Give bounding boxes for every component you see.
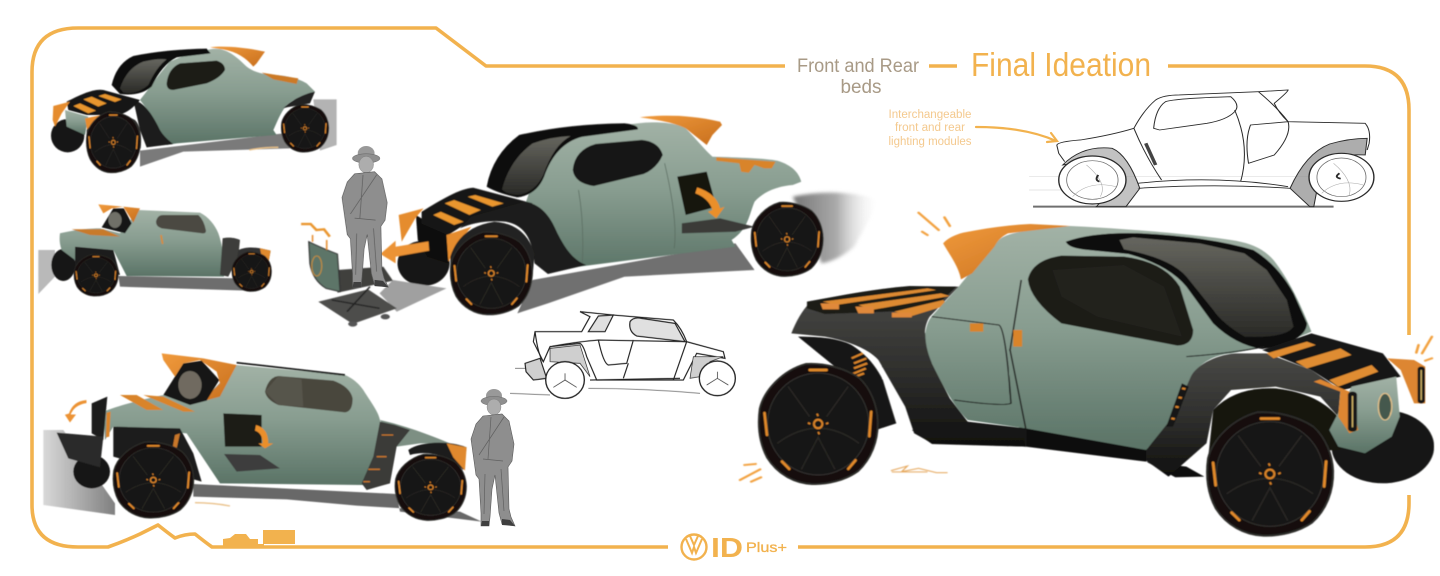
spoiler [640, 116, 722, 145]
sketch rear wheel [1309, 153, 1374, 201]
front fender [362, 422, 410, 490]
window [167, 61, 225, 90]
sketch motion lines [1029, 177, 1365, 190]
spoiler [98, 204, 140, 223]
door opening [223, 413, 262, 447]
rear wheel [759, 364, 878, 484]
sketch front arch [1063, 148, 1140, 207]
door handles [970, 323, 1022, 347]
body [60, 210, 224, 277]
front wheel [1207, 412, 1333, 536]
nose [65, 110, 88, 135]
front fender [460, 202, 586, 274]
rear upper panel [92, 397, 107, 440]
arrow: door fold [255, 425, 273, 448]
bed stripes [262, 73, 298, 84]
spoiler [162, 353, 237, 402]
logo: VW ID Plus+: Plus+ [746, 539, 787, 555]
chair shadow [380, 280, 446, 312]
car: large final ideation view [740, 213, 1434, 536]
annotation: lighting modules: front and rear [895, 122, 965, 134]
sketch wheels [546, 362, 584, 398]
chair back light module [309, 242, 340, 292]
sketch rear arch [1290, 138, 1367, 207]
rear wheel [751, 202, 823, 276]
car: central three-quarter view with open beds [301, 116, 880, 327]
sketch door seams [1057, 92, 1290, 188]
annotation: lighting modules: lighting modules [888, 136, 972, 148]
signature [891, 466, 948, 473]
sketch: three-quarter line drawing [510, 312, 735, 398]
rear bed fender [791, 287, 1026, 447]
rear arch [113, 427, 202, 482]
roof edge [237, 363, 345, 375]
icon: car towing trailer on frame [223, 530, 295, 546]
person: bottom figure [471, 389, 515, 526]
handle [161, 235, 163, 244]
arrow: light module removal [380, 241, 429, 263]
side window [1028, 256, 1193, 346]
hood behind front fender [380, 420, 450, 447]
badge [1378, 393, 1392, 420]
vents [363, 435, 393, 482]
roof glass [1066, 233, 1307, 349]
front fender [220, 238, 240, 277]
roof glass [487, 123, 638, 197]
chair handle [301, 224, 330, 237]
ground shadow [517, 243, 755, 313]
black fin [133, 100, 173, 147]
body [925, 226, 1311, 450]
bed opening [102, 208, 132, 233]
rear stripes [716, 157, 776, 173]
front wheel [451, 232, 532, 315]
sketch arch shading [550, 345, 723, 378]
bed stripes [72, 229, 120, 237]
rear arch [75, 247, 120, 275]
lights [399, 208, 471, 262]
ground shadow [140, 133, 290, 167]
chair seat [337, 267, 393, 293]
tailgate [57, 433, 103, 467]
rear wheel [281, 104, 329, 152]
rear wheel [232, 252, 271, 291]
front fender [1146, 353, 1340, 477]
hood [1262, 333, 1401, 390]
heading: Front and Rear beds [797, 56, 920, 98]
sketch grille [525, 358, 547, 380]
step [224, 454, 280, 472]
annotation: lighting modules: Interchangeable [888, 109, 972, 121]
nose panel [1329, 377, 1400, 453]
heading: Front and Rear beds: Front and Rear [797, 56, 920, 77]
sketch front wheel [1059, 156, 1126, 204]
bed top [807, 286, 957, 314]
far wheel [73, 455, 110, 488]
person: central figure [342, 146, 388, 287]
bed stripes [120, 395, 195, 412]
chair base [318, 289, 397, 324]
hood [422, 188, 533, 235]
rear wheel [395, 454, 466, 520]
near light module [1314, 379, 1358, 433]
emphasis sparks [740, 213, 1432, 482]
underbody [912, 427, 1204, 477]
door opening [677, 172, 716, 215]
arrow: annotation to sketch [976, 127, 1057, 142]
door seams [932, 280, 1265, 447]
body [103, 365, 385, 485]
window [573, 140, 663, 186]
lights [53, 102, 102, 137]
door seam [579, 163, 675, 263]
car: top left view [51, 47, 337, 173]
far light module [1387, 358, 1425, 403]
bed opening [163, 361, 219, 405]
front arch [450, 222, 534, 277]
roof glass [112, 49, 211, 95]
logo: VW ID Plus+: ID [711, 532, 743, 563]
front wheel well [1209, 388, 1340, 453]
far wheel [51, 249, 75, 281]
sketch: side view line drawing [1029, 90, 1374, 207]
side vent [1166, 383, 1189, 427]
rotating arrow [66, 401, 86, 422]
far front wheel [397, 241, 450, 286]
sketch window [1154, 97, 1237, 130]
sketch windows [588, 315, 685, 342]
title: Final Ideation: Final Ideation [971, 46, 1151, 83]
front fender arch [87, 116, 141, 148]
logo: VW ID Plus+ [682, 532, 787, 563]
heading: Front and Rear beds: beds [840, 77, 882, 98]
spoiler [210, 47, 265, 67]
sketch outline [533, 312, 725, 380]
front wheel [74, 254, 118, 296]
ground shadow [193, 484, 482, 522]
front wheel [113, 442, 194, 518]
sketch body outline [1057, 90, 1370, 150]
sketch seams [535, 332, 687, 380]
shadow [118, 276, 247, 291]
arrow: door fold [695, 187, 725, 218]
window [265, 376, 353, 412]
dark front opening [416, 215, 448, 263]
window [156, 215, 206, 233]
hood [67, 90, 140, 115]
far wheel [51, 119, 84, 152]
car: middle left side view [38, 204, 271, 296]
body [140, 49, 315, 145]
suspension spring [851, 353, 867, 378]
car: bottom left view with open bed [43, 353, 482, 522]
body [525, 122, 801, 273]
step [682, 218, 755, 233]
rear arch [283, 92, 315, 108]
annotation: lighting modules [888, 109, 972, 148]
spoiler [943, 224, 1070, 279]
rear wheel well [798, 337, 896, 430]
front wheel [86, 112, 140, 173]
